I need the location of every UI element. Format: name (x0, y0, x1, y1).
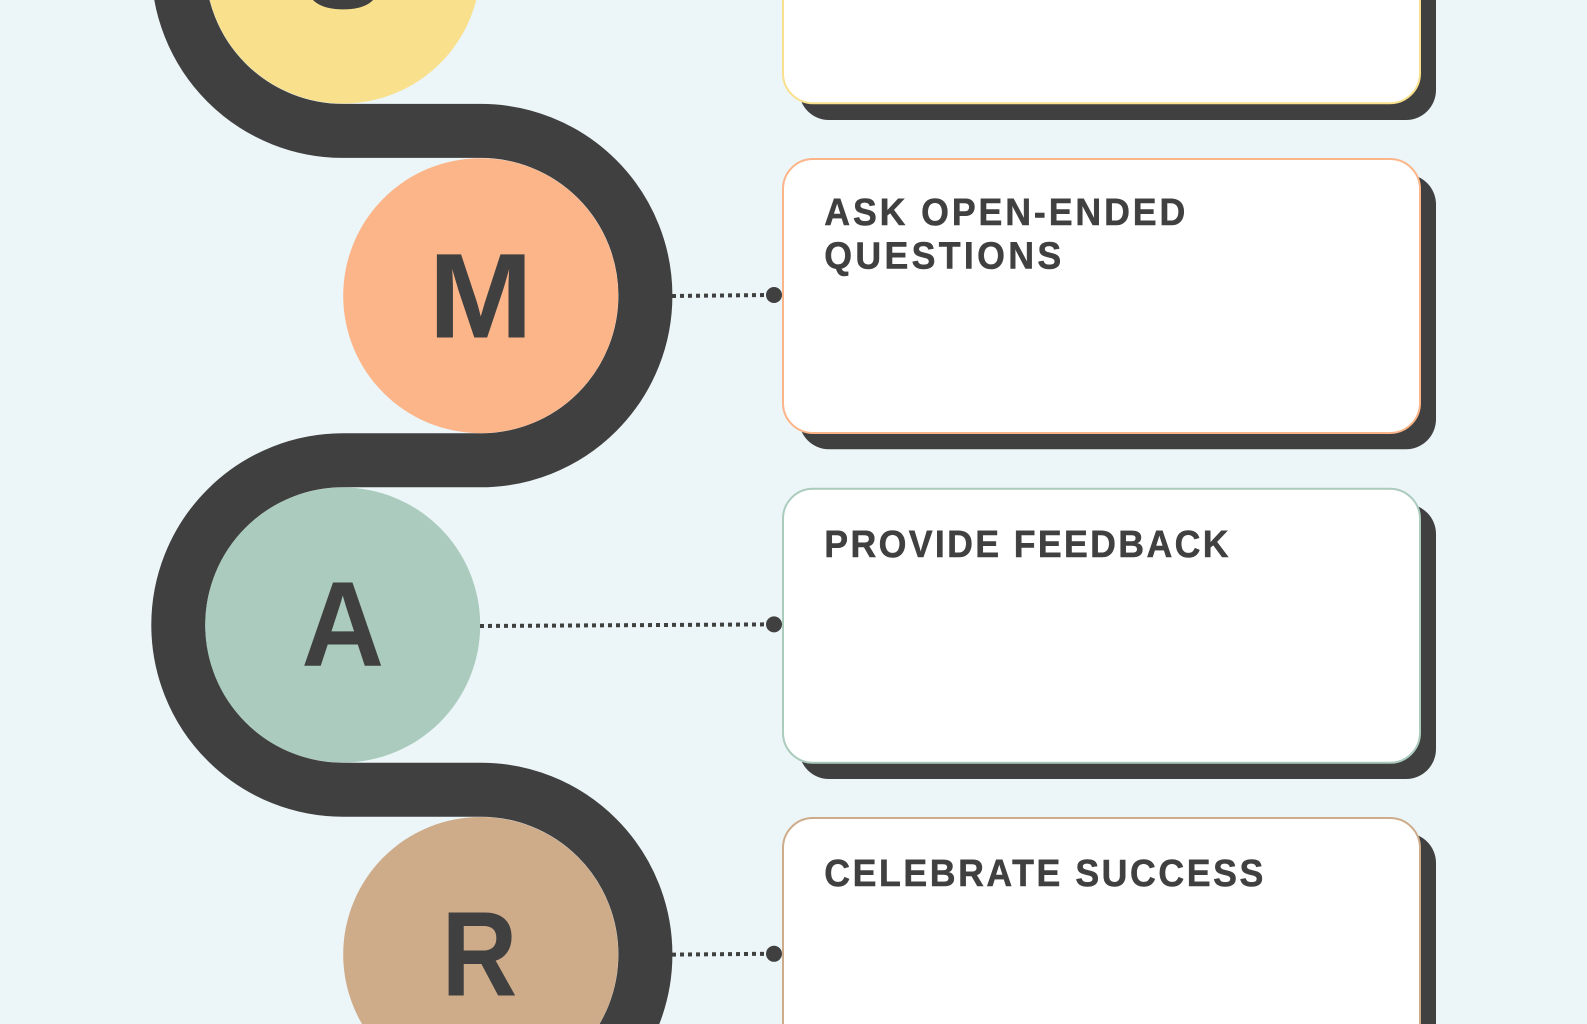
card heading (824, 191, 1185, 277)
connector: M to card (672, 287, 782, 303)
card heading: PROVIDE FEEDBACK (824, 523, 1229, 565)
card heading: CELEBRATE SUCCESS (824, 852, 1263, 894)
step M: circle and letter: M (428, 228, 533, 364)
step A: circle and letter (205, 488, 480, 762)
step M: circle and letter (343, 158, 618, 433)
step S: circle and letter (206, 0, 480, 104)
connector: R to card (672, 946, 782, 962)
card R: celebrate success (783, 818, 1436, 1024)
card M: ask open-ended questions (783, 159, 1436, 449)
step R: circle and letter (343, 817, 618, 1024)
card heading: ASK OPEN-ENDED (824, 191, 1185, 233)
step A: circle and letter: A (301, 556, 384, 691)
card A: provide feedback (783, 489, 1436, 779)
step R: circle and letter: R (442, 886, 517, 1021)
card heading: QUESTIONS (824, 235, 1061, 277)
winding path ribbon (178, 0, 645, 1024)
connector: A to card (480, 616, 782, 632)
card S (partly cropped) (783, 0, 1436, 120)
